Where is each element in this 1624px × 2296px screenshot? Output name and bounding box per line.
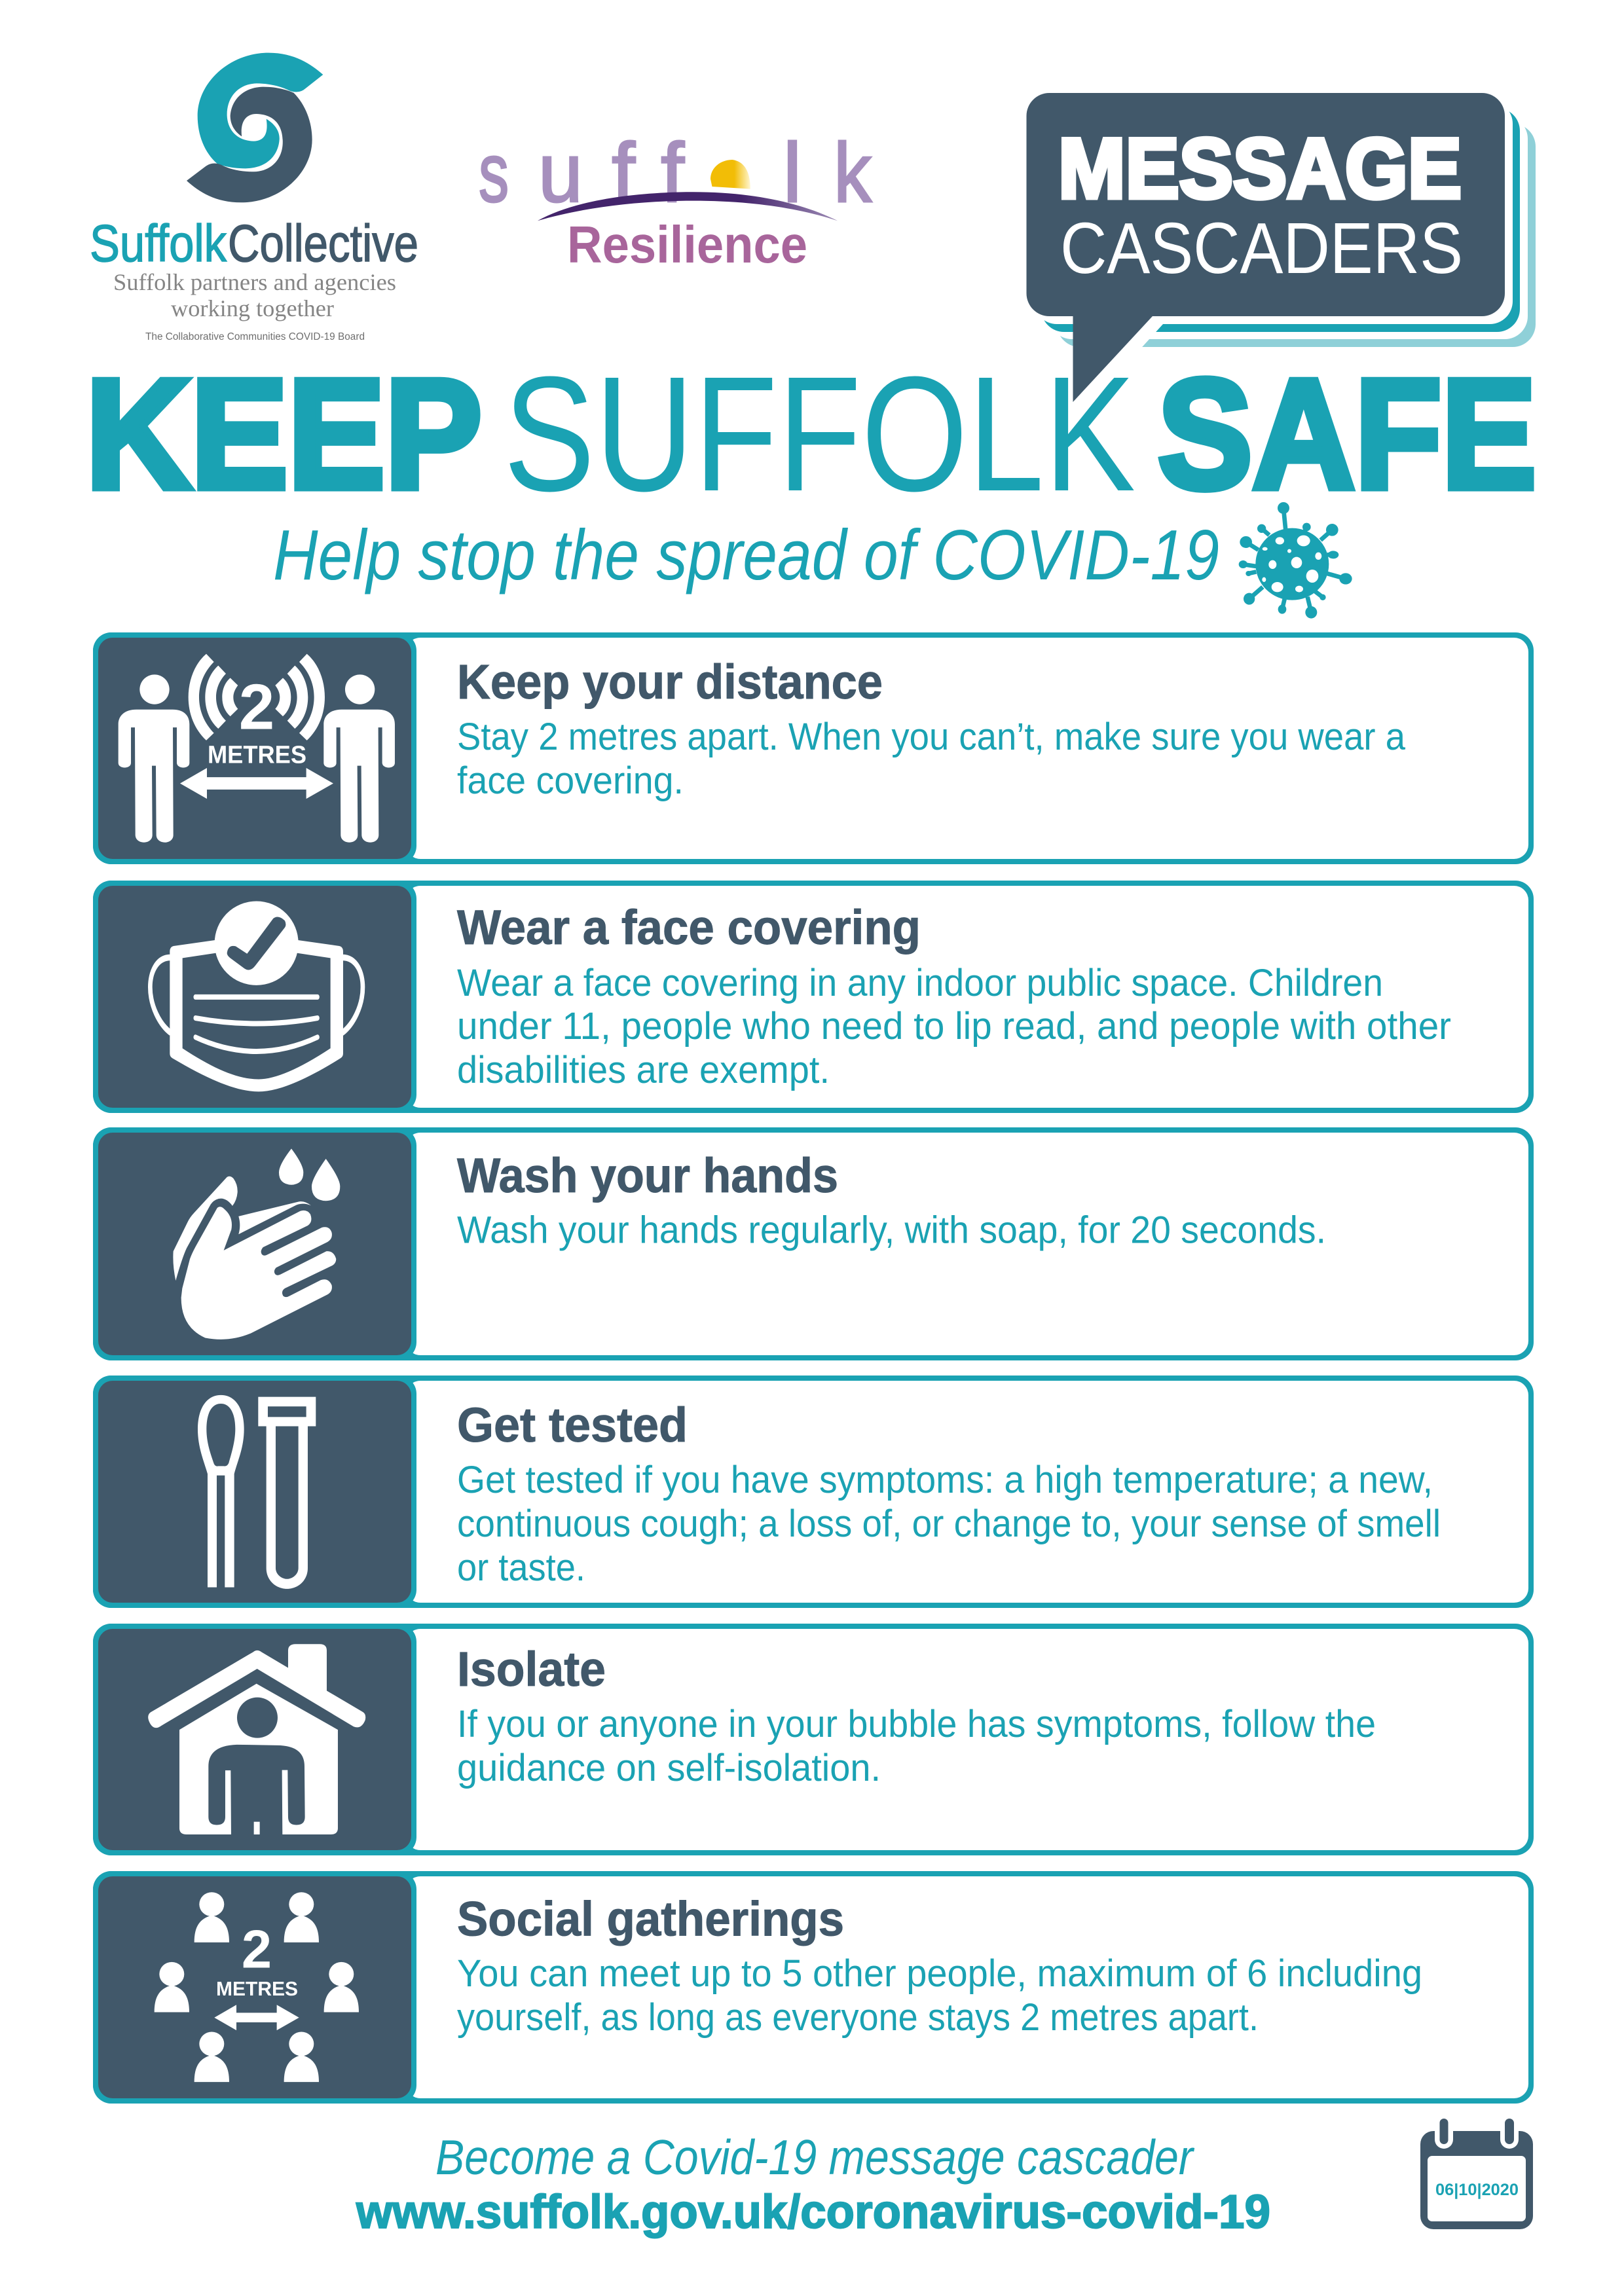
icon: swab and test tube [198,1395,316,1589]
body text: Get tested if you have symptoms: a high temperature; a new, [457,1459,1433,1501]
body text: disabilities are exempt. [457,1049,830,1091]
body text: Stay 2 metres apart. When you can’t, make sure you wear a [457,716,1406,758]
icon: six people two metres apart: METRES [216,1977,298,2000]
wordmark letters: suffolk: s [479,126,509,220]
logo: Suffolk Resilience [479,126,872,274]
body text: You can meet up to 5 other people, maximum of 6 including [457,1952,1422,1995]
panel: wear a face covering [93,881,1534,1113]
icon: calendar with date [1420,2119,1533,2229]
body text: under 11, people who need to lip read, and people with other [457,1005,1451,1048]
board credit: The Collaborative Communities COVID-19 Board [145,331,365,342]
body text [457,1459,1441,1589]
title: Keep Suffolk Safe: SAFE [1158,348,1536,521]
icon: two people two metres apart: METRES [208,741,306,769]
wordmark letters: suffolk: k [834,126,872,219]
footer url: www.suffolk.gov.uk/coronavirus-covid-19 [356,2186,1270,2238]
bubble text: MESSAGE: MESSAGE [1058,120,1462,216]
body text: Wash your hands regularly, with soap, for 20 seconds. [457,1209,1326,1252]
title: Keep Suffolk Safe: SUFFOLK [504,342,1135,525]
bubble text: CASCADERS: CASCADERS [1060,208,1463,289]
body text: face covering. [457,759,684,802]
panel: wash your hands [93,1127,1534,1360]
wordmark letters: suffolk: u [538,126,583,220]
body text [457,716,1406,802]
wordmark letters: suffolk: f [661,126,684,220]
body text: yourself, as long as everyone stays 2 metres apart. [457,1996,1259,2039]
wordmark: Resilience: Resilience [567,215,807,274]
heading: Wash your hands [457,1148,838,1203]
speech bubble: Message Cascaders [1027,93,1536,419]
tagline [113,269,396,321]
icon: person in house [148,1644,365,1834]
heading: Keep your distance [457,655,883,709]
tagline: Suffolk partners and agencies [113,269,396,295]
heading: Get tested [457,1398,688,1452]
heading: Social gatherings [457,1892,844,1946]
footer call to action: Become a Covid-19 message cascader [435,2130,1195,2185]
body text [457,962,1451,1091]
icon: six people two metres apart: 2 [242,1918,272,1980]
body text: If you or anyone in your bubble has symptoms, follow the [457,1703,1376,1745]
subtitle: Help stop the spread of COVID-19 [273,515,1219,595]
icon: six people two metres apart [155,1892,359,2082]
panel: get tested [93,1376,1534,1608]
wordmark: Suffolk Collective: Collective [228,214,418,272]
icon: virus [1239,502,1352,619]
panel: keep your distance [93,632,1534,864]
date: 06|10|2020 [1435,2181,1519,2199]
heading: Wear a face covering [457,900,921,955]
tagline: working together [171,295,334,321]
body text: continuous cough; a loss of, or change to, your sense of smell [457,1503,1441,1545]
wordmark letters: suffolk: l [783,126,802,220]
icon: sun and horizon [538,160,838,221]
icon: two people two metres apart: 2 [239,670,274,742]
icon: swirl [187,53,323,202]
body text: guidance on self-isolation. [457,1747,881,1789]
wordmark: Suffolk Collective: Suffolk [90,214,227,272]
wordmark letters: suffolk: f [612,126,635,220]
body text: Wear a face covering in any indoor public space. Children [457,962,1383,1004]
wordmark: Suffolk Collective [90,214,418,272]
logo: Suffolk Collective [90,53,418,342]
icon: two people two metres apart [119,654,395,843]
panel: social gatherings [93,1871,1534,2104]
title: Keep Suffolk Safe: KEEP [86,348,482,521]
wordmark letters: suffolk [479,126,872,220]
body text: or taste. [457,1546,585,1589]
body text [457,1952,1422,2039]
icon: face mask with tick [150,901,363,1091]
title: Keep Suffolk Safe [86,342,1536,525]
heading: Isolate [457,1642,606,1696]
panel: isolate [93,1624,1534,1855]
icon: washing hands [173,1148,340,1339]
body text [457,1703,1376,1789]
